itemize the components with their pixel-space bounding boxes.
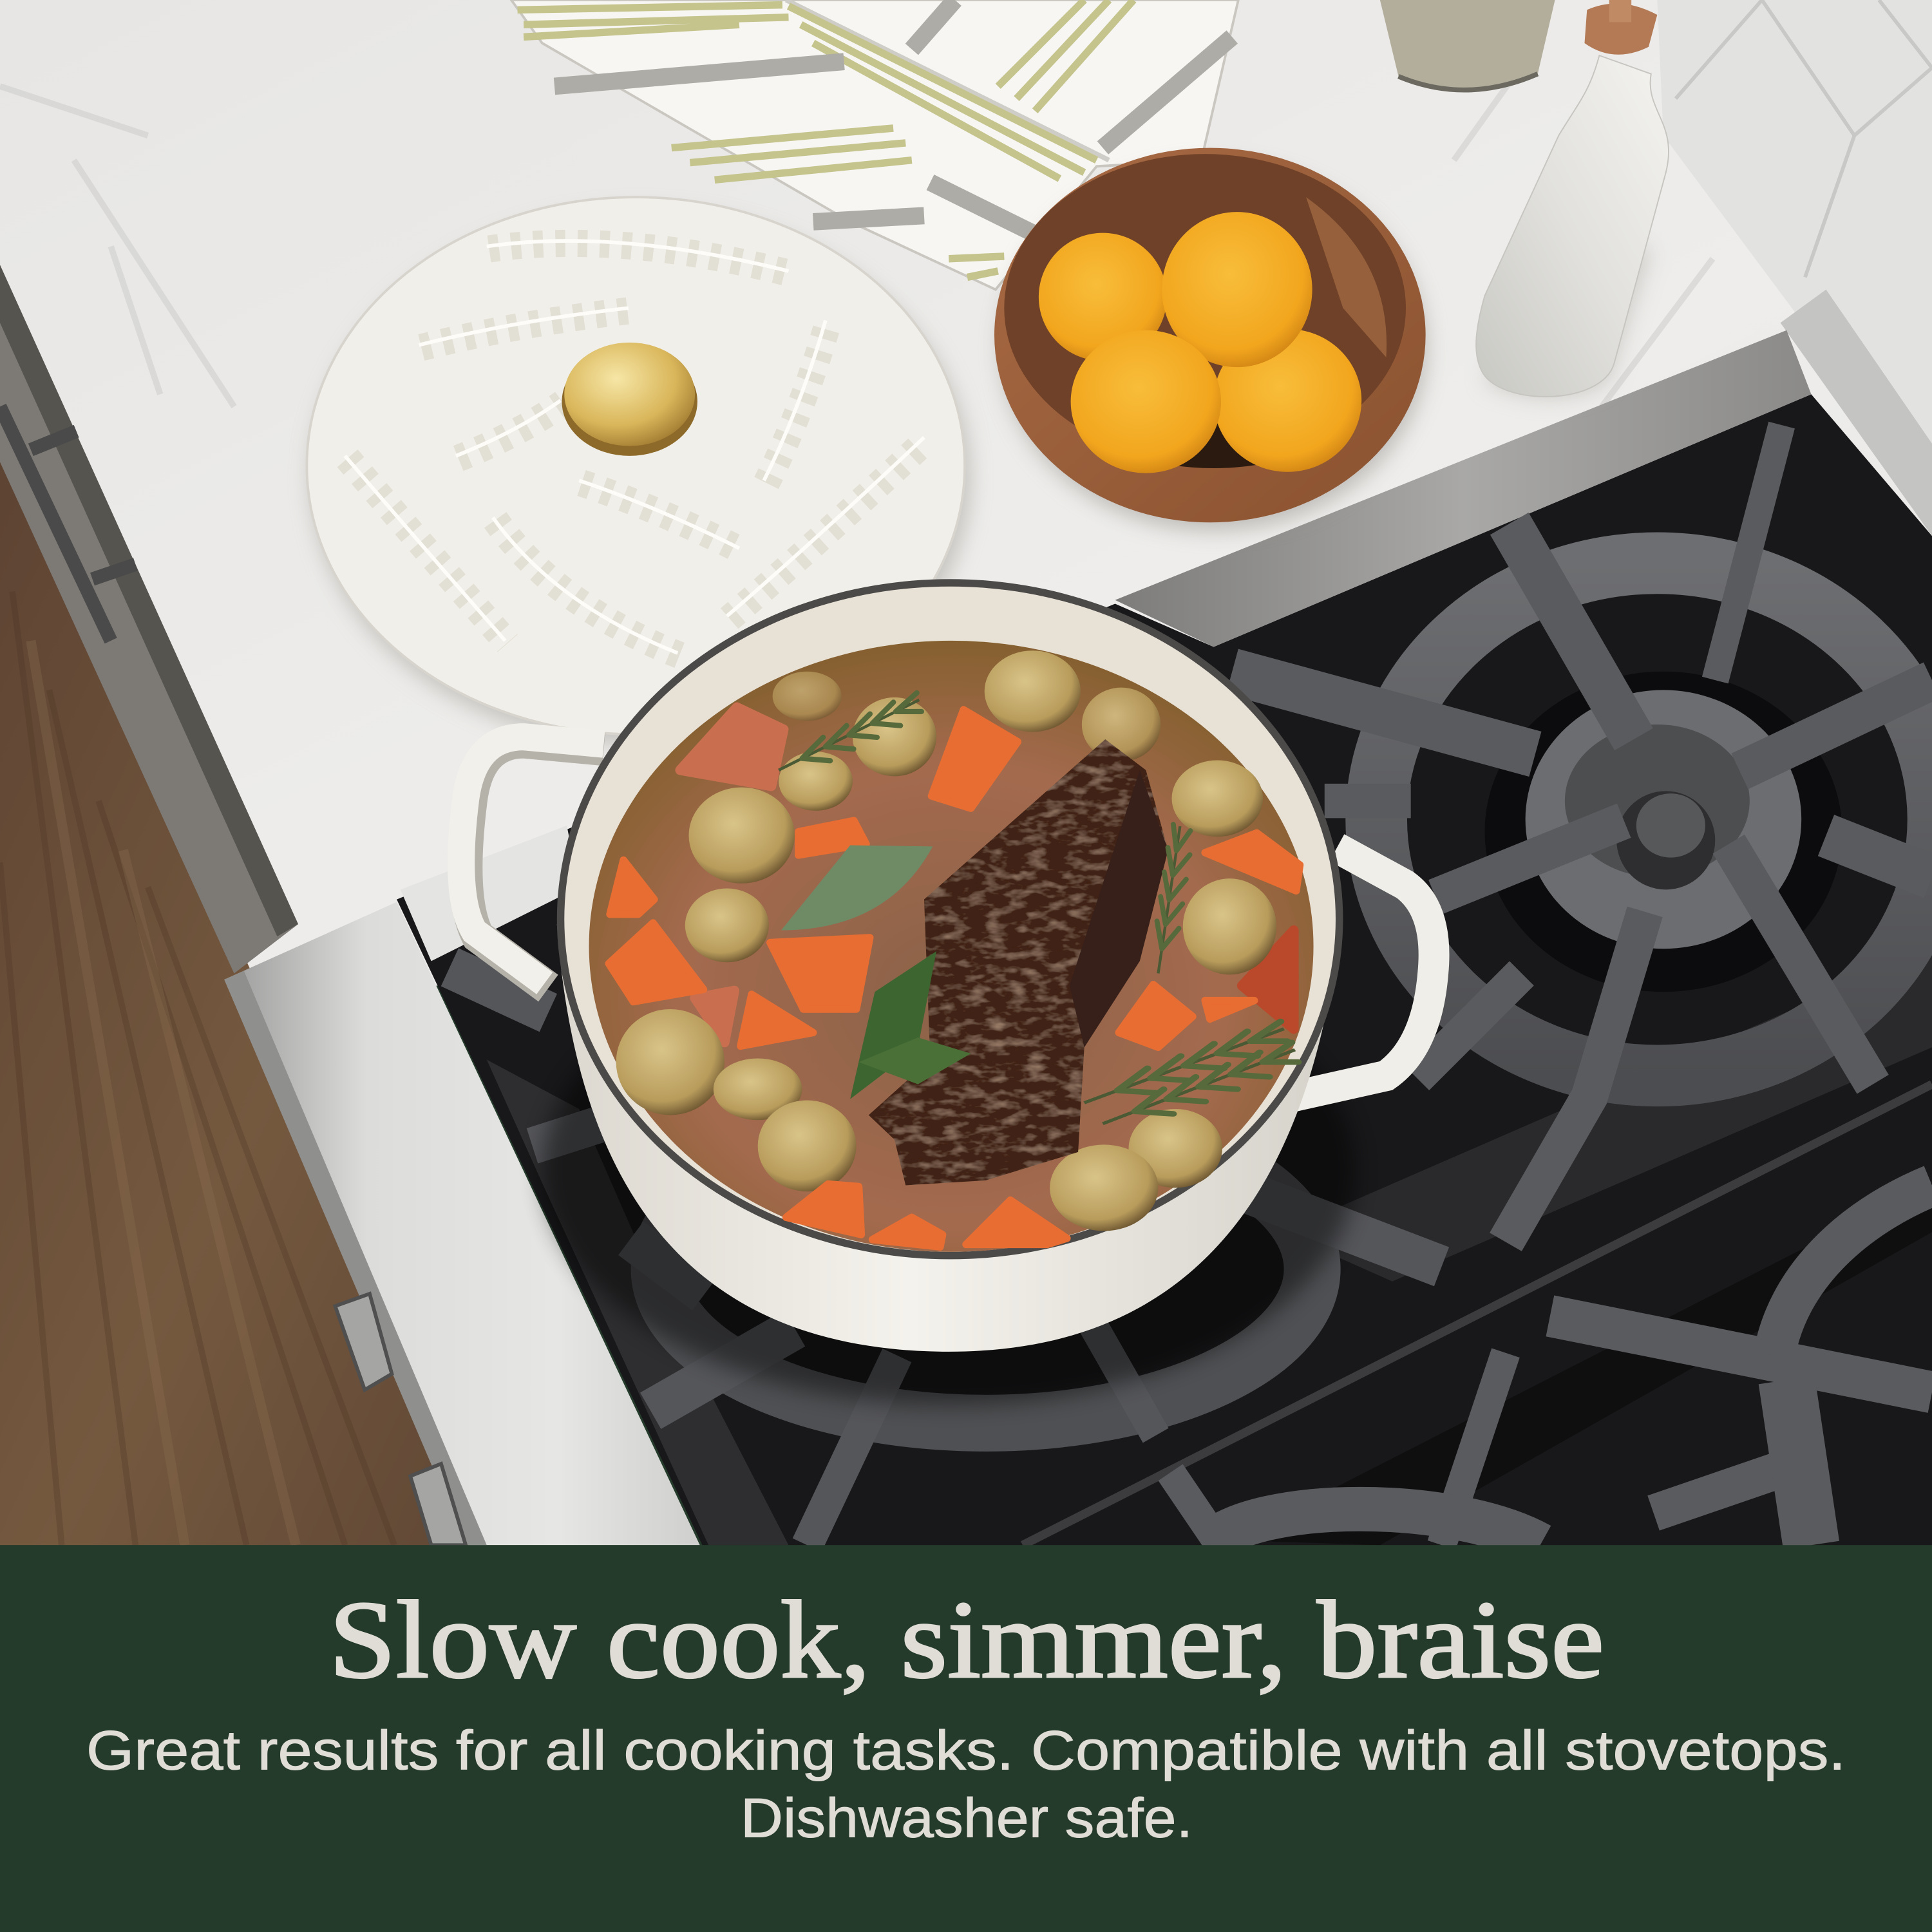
- pot handles: [461, 737, 1434, 1099]
- soap bottle: [1476, 0, 1669, 397]
- wooden bowl: [994, 148, 1426, 530]
- description text: Great results for all cooking tasks. Compatible with all stovetops.: [86, 1719, 1846, 1781]
- broth: [589, 641, 1314, 1252]
- wood floor: [0, 450, 518, 1545]
- carrots: [609, 710, 1300, 1247]
- pot roast meat: [869, 739, 1168, 1186]
- pot rim: [557, 579, 1343, 1259]
- bottom banner: [0, 1545, 1932, 1932]
- rosemary sprigs: [779, 693, 1298, 1124]
- marble countertop: [0, 0, 1932, 986]
- gold knob: [562, 343, 697, 456]
- potatoes: [616, 650, 1276, 1231]
- embossed lid with gold knob: [307, 197, 970, 744]
- stove body: [397, 394, 1932, 1545]
- lemons: [1039, 212, 1361, 473]
- description text: [86, 1719, 1846, 1850]
- metal cup: [1380, 0, 1555, 90]
- cabinet with handle: [0, 265, 298, 973]
- photo: kitchen stovetop scene: [0, 0, 1932, 1545]
- grate: lower right burners: [1171, 1186, 1932, 1545]
- grate: large rear burner: [1232, 425, 1932, 1242]
- description text: Dishwasher safe.: [741, 1788, 1193, 1850]
- bay leaves: [781, 845, 971, 1099]
- kitchen towel: [511, 0, 1238, 290]
- stainless front side rail: [224, 826, 700, 1545]
- dutch oven pot: [461, 579, 1434, 1405]
- grate: front burner under pot: [450, 967, 1442, 1545]
- wall tiles and backsplash: [1657, 0, 1932, 536]
- stainless rear rail: [1115, 330, 1811, 647]
- submerged carrots: [680, 707, 1294, 1043]
- heading: Slow cook, simmer, braise: [329, 1579, 1604, 1701]
- pot body: [557, 924, 1341, 1352]
